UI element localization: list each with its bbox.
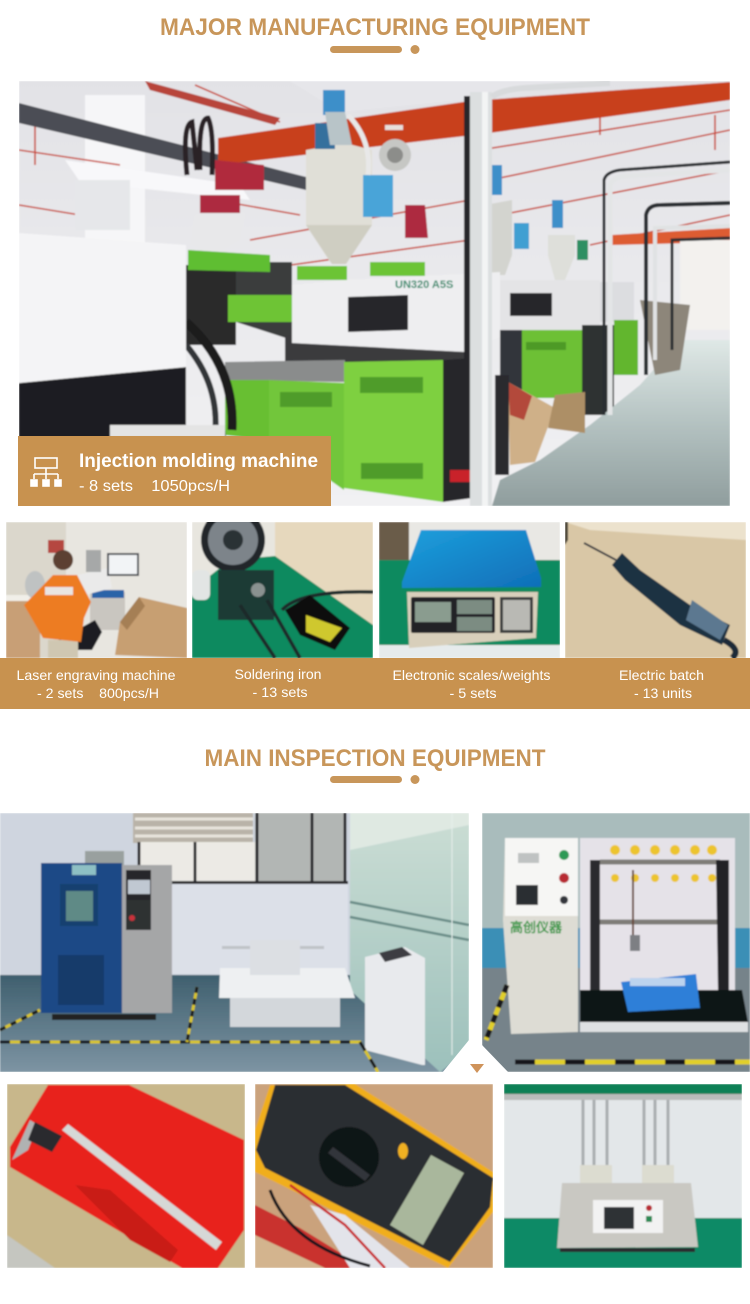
caption band [0, 658, 750, 709]
photo: cable bending tester [482, 813, 750, 1072]
notch with down arrow [442, 1032, 509, 1073]
caption: laser engraving machine [16, 667, 176, 701]
green cabinets [225, 358, 472, 502]
caption: soldering iron: - 13 sets [252, 684, 308, 700]
tester cabinet [503, 838, 578, 1034]
floor [492, 340, 730, 506]
callout: injection molding machine [18, 436, 331, 506]
photo: push-button life tester [504, 1084, 742, 1268]
hopper [297, 90, 425, 280]
heading ornament: bar and dot [330, 45, 420, 54]
main machine control housing [186, 250, 500, 382]
caption: electric batch [619, 667, 704, 701]
heading: main inspection equipment: MAIN INSPECTION EQUIPMENT [204, 745, 546, 772]
foreground dark machinery [19, 233, 235, 506]
photo: environmental and vibration test room [0, 813, 469, 1072]
vibration table [219, 940, 355, 1027]
caption: electronic scales [392, 667, 550, 701]
caption: laser engraving machine: Laser engraving machine [16, 667, 176, 683]
heading: major manufacturing equipment: MAJOR MANUFACTURING EQUIPMENT [160, 14, 590, 41]
caption: soldering iron: Soldering iron [234, 666, 322, 682]
caption: electronic scales: Electronic scales/weights [392, 667, 550, 683]
photo: digital multimeter [255, 1084, 493, 1268]
icon: network hierarchy [31, 458, 61, 486]
caption: electric batch: - 13 units [634, 685, 692, 701]
photo: laser engraving machine [6, 522, 187, 658]
distant machines [485, 165, 638, 415]
floor hazard stripes [0, 987, 378, 1072]
caption: laser engraving machine: - 2 sets 800pcs/H [37, 685, 159, 701]
photo: injection molding machines [19, 81, 730, 506]
photo: electric screwdriver [565, 522, 746, 658]
caption: soldering iron [234, 666, 322, 700]
chamber [41, 851, 172, 1017]
pipes [464, 83, 730, 506]
heading ornament: bar and dot [330, 775, 420, 784]
photo: vernier caliper in red case [7, 1084, 245, 1268]
bags [508, 382, 555, 465]
caption: electronic scales: - 5 sets [450, 685, 496, 701]
callout heading: Injection molding machine [79, 451, 318, 472]
control box [365, 947, 425, 1065]
icon: down triangle [470, 1064, 484, 1073]
tester cabinet: 高创仪器 [510, 920, 563, 935]
photo: soldering iron [192, 522, 373, 658]
callout details: - 8 sets 1050pcs/H [79, 478, 230, 495]
main machine control housing: UN320 A5S [395, 279, 453, 291]
robot arm [65, 118, 428, 255]
photo: electronic scale [379, 522, 560, 658]
caption: electric batch: Electric batch [619, 667, 704, 683]
